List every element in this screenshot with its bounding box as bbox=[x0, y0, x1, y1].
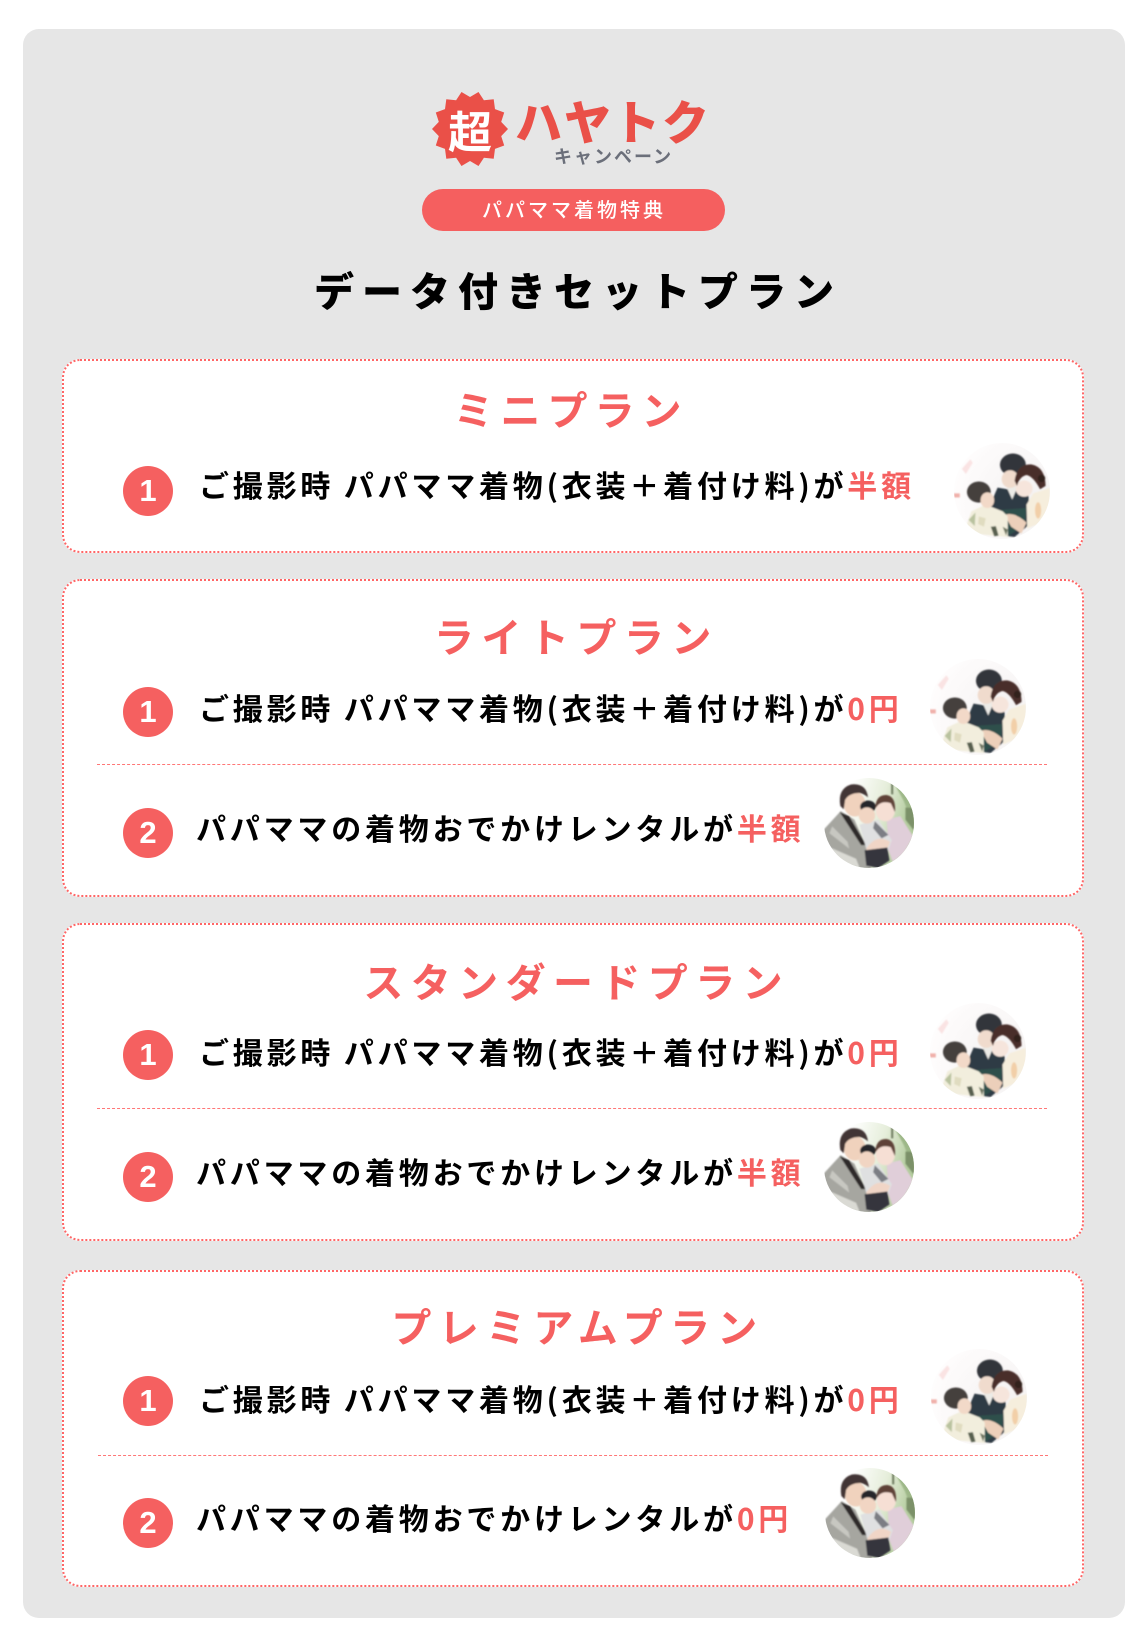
panel: mini plan bbox=[62, 359, 1084, 553]
photo: family 1 bbox=[931, 1358, 1027, 1444]
heading: premium plan: プレミアムプラン bbox=[391, 1296, 765, 1354]
text: standard benefit 1: ご撮影時 パパママ着物(衣装＋着付け料)が0円 bbox=[199, 1029, 903, 1073]
badge 2 bbox=[123, 1498, 173, 1548]
badge 1: 1 bbox=[139, 1037, 157, 1072]
photo: family 2 bbox=[826, 1468, 915, 1558]
photo: family 2 bbox=[824, 1122, 914, 1212]
logo wordmark: ハヤトク bbox=[515, 85, 711, 154]
badge 1 bbox=[123, 466, 173, 516]
badge character: 超 bbox=[448, 97, 492, 161]
photo: family 2 bbox=[824, 778, 914, 868]
text: light benefit 1: ご撮影時 パパママ着物(衣装＋着付け料)が0円 bbox=[199, 685, 903, 729]
badge 2 bbox=[123, 808, 173, 858]
pill text: パパママ着物特典 bbox=[482, 194, 666, 223]
text: light benefit 2: パパママの着物おでかけレンタルが半額 bbox=[196, 805, 804, 849]
badge 1: 1 bbox=[139, 473, 157, 508]
text: premium benefit 1: ご撮影時 パパママ着物(衣装＋着付け料)が0円 bbox=[199, 1376, 903, 1420]
badge 1: 1 bbox=[139, 1383, 157, 1418]
badge 1 bbox=[123, 687, 173, 737]
badge 2: 2 bbox=[139, 1159, 157, 1194]
badge 2 bbox=[123, 1152, 173, 1202]
title: データ付きセットプラン bbox=[314, 260, 842, 318]
heading: light plan: ライトプラン bbox=[434, 606, 719, 664]
photo: family 1 bbox=[954, 452, 1050, 538]
text: standard benefit 2: パパママの着物おでかけレンタルが半額 bbox=[196, 1149, 804, 1193]
heading: standard plan: スタンダードプラン bbox=[363, 951, 790, 1009]
photo: family 1 bbox=[930, 668, 1026, 754]
badge 1 bbox=[123, 1030, 173, 1080]
heading: mini plan: ミニプラン bbox=[454, 379, 688, 437]
text: premium benefit 2: パパママの着物おでかけレンタルが0円 bbox=[196, 1495, 792, 1539]
badge 1 bbox=[123, 1376, 173, 1426]
badge 2: 2 bbox=[139, 815, 157, 850]
panel: premium plan bbox=[62, 1270, 1084, 1587]
logo subtitle: キャンペーン bbox=[554, 143, 673, 169]
pill label bbox=[422, 189, 725, 231]
logo: 超ハヤトクキャンペーン bbox=[432, 85, 711, 169]
badge 1: 1 bbox=[139, 694, 157, 729]
panel: light plan bbox=[62, 579, 1084, 897]
badge 2: 2 bbox=[139, 1505, 157, 1540]
panel: standard plan bbox=[62, 923, 1084, 1241]
photo: family 1 bbox=[930, 1012, 1026, 1098]
icon: red starburst badge bbox=[432, 92, 508, 166]
text: mini benefit 1: ご撮影時 パパママ着物(衣装＋着付け料)が半額 bbox=[199, 462, 915, 506]
